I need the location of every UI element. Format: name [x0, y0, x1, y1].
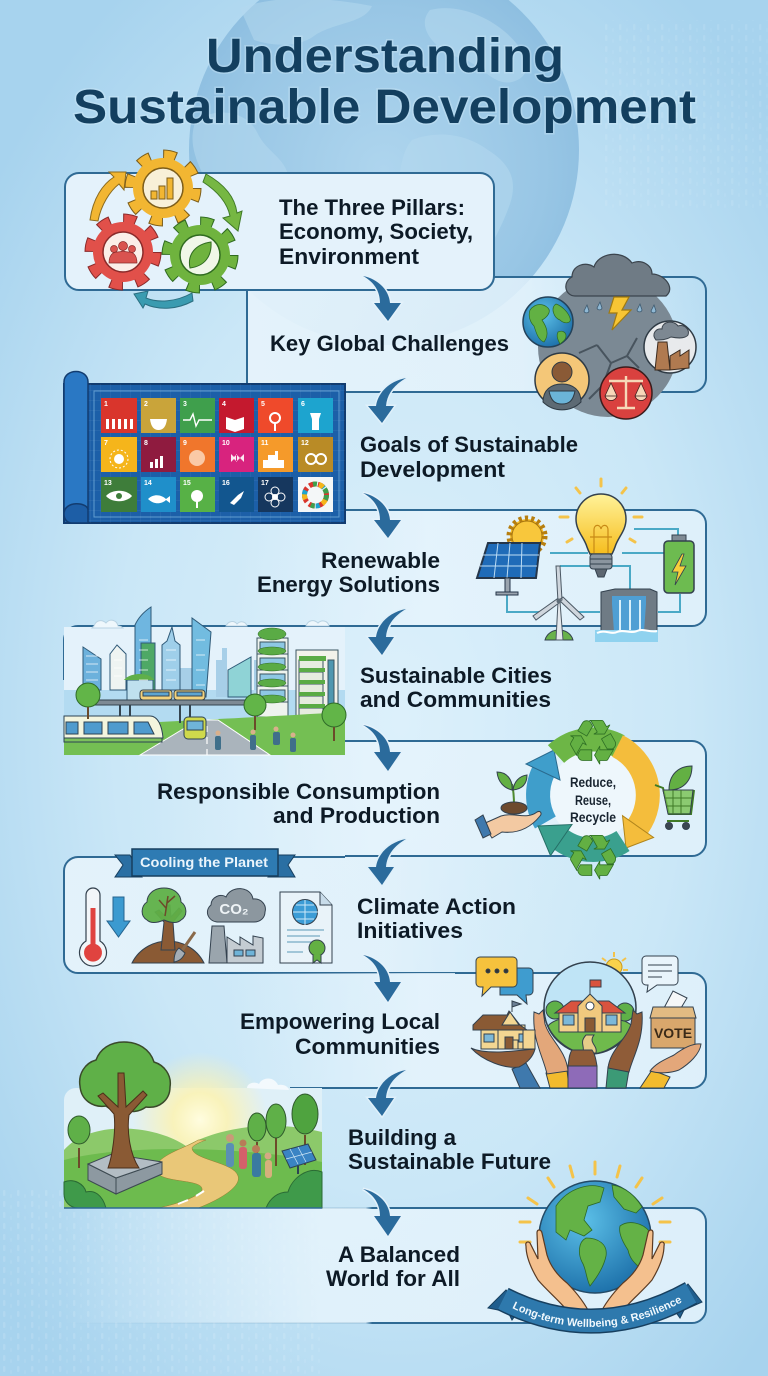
title: Understanding	[206, 30, 564, 83]
text: sustainable cities	[360, 663, 552, 712]
text: responsible consumption: and Production	[273, 803, 440, 828]
small trees	[68, 1094, 318, 1168]
SDG tile grid: 16	[222, 480, 230, 487]
right supporting hand	[608, 1010, 642, 1072]
big tree	[80, 1042, 170, 1168]
arrow: communities to future	[368, 1070, 406, 1116]
text: goals of sustainable development: Development	[360, 457, 506, 482]
icon: vote box: VOTE	[654, 1025, 692, 1041]
icon: global challenges cluster	[523, 254, 696, 419]
hills	[64, 1126, 322, 1208]
text: climate action: Climate Action	[357, 894, 516, 919]
panel outline: balanced world	[64, 1208, 706, 1323]
ground	[64, 712, 345, 755]
SDG tile grid: 13	[104, 480, 112, 487]
background globe	[189, 0, 579, 345]
icon: CO2 cloud and factory: CO₂	[219, 901, 249, 918]
icon: renewable energy system	[477, 479, 694, 642]
foreground bushes	[64, 1170, 322, 1208]
left supporting hand	[534, 1010, 568, 1074]
text: responsible consumption	[157, 779, 440, 828]
binary data texture: lower left	[0, 1190, 320, 1376]
arrow: green cycle	[203, 174, 242, 231]
panel outline: empowering communities	[290, 973, 706, 1088]
title: Sustainable Development	[73, 81, 696, 134]
binary data texture: upper right	[600, 20, 768, 210]
bus	[184, 717, 206, 739]
SDG tile grid: 6	[301, 401, 305, 408]
icon: recycle loop	[475, 706, 694, 894]
icon: community hands	[471, 952, 701, 1088]
road	[156, 1140, 238, 1208]
panel outline: sustainable cities	[64, 626, 345, 680]
text: building a sustainable future	[348, 1125, 551, 1174]
icon: small earth	[523, 297, 573, 347]
teal arc arrow	[538, 824, 623, 856]
SDG tile grid: 14	[144, 480, 152, 487]
icon: vote box	[650, 991, 701, 1073]
sun rays	[520, 1162, 670, 1242]
arrow: pillars to challenges	[363, 276, 401, 321]
icon: policy document	[280, 892, 332, 963]
connector lines	[507, 529, 680, 612]
icon: battery	[664, 535, 694, 593]
ring interior	[549, 751, 637, 839]
text: three pillars: Economy, Society,	[279, 219, 473, 244]
text: climate action	[357, 894, 516, 943]
text: building a sustainable future: Building a	[348, 1125, 457, 1150]
SDG tile grid: 7	[104, 440, 108, 447]
icon: small house on hand	[471, 1001, 535, 1067]
text: goals of sustainable development: Goals of Sustainable	[360, 432, 578, 457]
icon: down arrow	[107, 897, 130, 937]
residential tower	[296, 650, 338, 727]
panel outline: climate action	[64, 857, 460, 973]
yellow arc arrow	[618, 746, 654, 848]
icon: globe in hands with banner	[487, 1160, 703, 1334]
banner: cooling the planet: Cooling the Planet	[140, 854, 268, 870]
icon: green environment gear	[167, 222, 233, 288]
icon: yellow economy gear	[130, 155, 196, 221]
chat bubbles	[476, 957, 533, 1004]
SDG tile grid: 11	[261, 440, 269, 447]
arrow: climate to communities	[363, 955, 401, 1002]
arrow: goals to renewable	[363, 493, 401, 538]
text: renewable energy solutions	[257, 548, 440, 597]
text: empowering communities: Empowering Local	[240, 1009, 440, 1034]
sun	[600, 952, 628, 975]
monorail	[90, 690, 247, 723]
panel: empowering communities	[230, 973, 706, 1088]
people	[226, 1134, 272, 1178]
recycle text: Reduce,	[570, 775, 616, 790]
solar panel	[282, 1144, 316, 1174]
tram	[64, 716, 163, 742]
green tower	[257, 628, 288, 717]
panel: renewable energy	[240, 510, 706, 626]
recycle text: Recycle	[570, 810, 616, 825]
SDG tile grid: 10	[222, 440, 230, 447]
SDG tile grid: 9	[183, 440, 187, 447]
cloud	[247, 1078, 289, 1090]
ribbon	[487, 1282, 703, 1334]
white speech bubble	[642, 956, 678, 992]
icon: factory pollution	[644, 321, 696, 373]
text: key global challenges: Key Global Challenges	[270, 331, 509, 356]
arrow: challenges to goals	[368, 378, 406, 423]
icon: red society gear	[90, 219, 156, 285]
left hand	[526, 1230, 591, 1318]
text: sustainable cities: Sustainable Cities	[360, 663, 552, 688]
SDG tile grid: 3	[183, 401, 187, 408]
text: climate action: Initiatives	[357, 918, 463, 943]
icon: hydro dam	[595, 589, 658, 642]
text: renewable energy solutions: Renewable	[321, 548, 440, 573]
SDG tile grid	[101, 398, 333, 512]
icon: sun	[510, 519, 544, 553]
recycle text	[570, 775, 616, 825]
panel: balanced world	[64, 1208, 706, 1323]
recycle text: Reuse,	[575, 793, 611, 808]
globe scene	[544, 962, 636, 1054]
SDG tile grid: 1	[104, 401, 108, 408]
text: three pillars: The Three Pillars:	[279, 195, 465, 220]
panel: three pillars	[65, 173, 494, 290]
icon: wind turbine	[533, 566, 584, 640]
trees and people	[76, 683, 346, 752]
text: responsible consumption: Responsible Consumption	[157, 779, 440, 804]
ribbon: Long-term Wellbeing & Resilience	[512, 1298, 682, 1328]
text: balanced world for all	[326, 1242, 460, 1291]
arrow: renewable to cities	[368, 609, 406, 655]
icon: recycle symbol bottom: ♻	[565, 821, 621, 894]
panel: climate action	[64, 857, 600, 973]
banner: cooling the planet	[115, 849, 295, 877]
SDG tile grid: 4	[222, 401, 226, 408]
text: goals of sustainable development	[360, 432, 578, 482]
icon: hand with seedling	[475, 772, 541, 838]
center hand	[568, 1050, 597, 1066]
SDG tile grid: 2	[144, 401, 148, 408]
distant skyline	[178, 648, 262, 697]
icon: hunger person	[535, 353, 589, 410]
text: three pillars: Environment	[279, 244, 420, 269]
icon: light bulb	[560, 479, 642, 577]
panel outline: renewable energy	[345, 510, 706, 626]
icon: SDG blueprint board	[64, 372, 345, 523]
text: sustainable cities: and Communities	[360, 687, 551, 712]
text: empowering communities	[240, 1009, 440, 1059]
arrow: yellow cycle	[90, 172, 126, 221]
text: renewable energy solutions: Energy Solutions	[257, 572, 440, 597]
illustration: building the future	[64, 1042, 322, 1208]
icon: recycle symbol top: ♻	[565, 706, 621, 779]
SDG tile grid: 12	[301, 440, 309, 447]
arrow: consumption to climate	[368, 839, 406, 885]
panel outline: responsible consumption	[345, 741, 706, 856]
SDG tile grid: 15	[183, 480, 191, 487]
arrow: future to balanced world	[363, 1189, 401, 1236]
text: balanced world for all: World for All	[326, 1266, 460, 1291]
text: three pillars	[279, 195, 473, 269]
title	[73, 30, 696, 134]
icon: CO2 cloud and factory	[207, 889, 265, 963]
road	[140, 720, 270, 755]
green arc top	[556, 740, 619, 754]
illustration: sustainable city	[64, 607, 346, 755]
SDG tile grid: 8	[144, 440, 148, 447]
blue arc arrow	[526, 750, 560, 822]
panel: key global challenges	[247, 277, 706, 392]
icon: shopping cart	[655, 766, 694, 830]
right hand	[599, 1230, 664, 1318]
icon: storm cloud	[566, 254, 670, 330]
icon: tree with shovel	[132, 888, 204, 963]
globe	[539, 1181, 652, 1293]
text: building a sustainable future: Sustainable Future	[348, 1149, 551, 1174]
SDG tile grid: 5	[261, 401, 265, 408]
icon: thermometer	[80, 888, 106, 966]
text: balanced world for all: A Balanced	[338, 1242, 460, 1267]
arrow: cities to consumption	[363, 725, 401, 771]
concrete block	[88, 1154, 162, 1194]
sleeves	[512, 1063, 670, 1088]
icon: solar panel	[477, 543, 540, 595]
skyline towers	[83, 607, 251, 700]
icon: three pillars gears	[90, 155, 242, 308]
text: empowering communities: Communities	[295, 1034, 440, 1059]
arrow: teal cycle	[134, 291, 193, 308]
SDG tile grid: 17	[261, 480, 269, 487]
icon: justice scales	[600, 367, 652, 419]
panel: responsible consumption	[150, 741, 706, 856]
